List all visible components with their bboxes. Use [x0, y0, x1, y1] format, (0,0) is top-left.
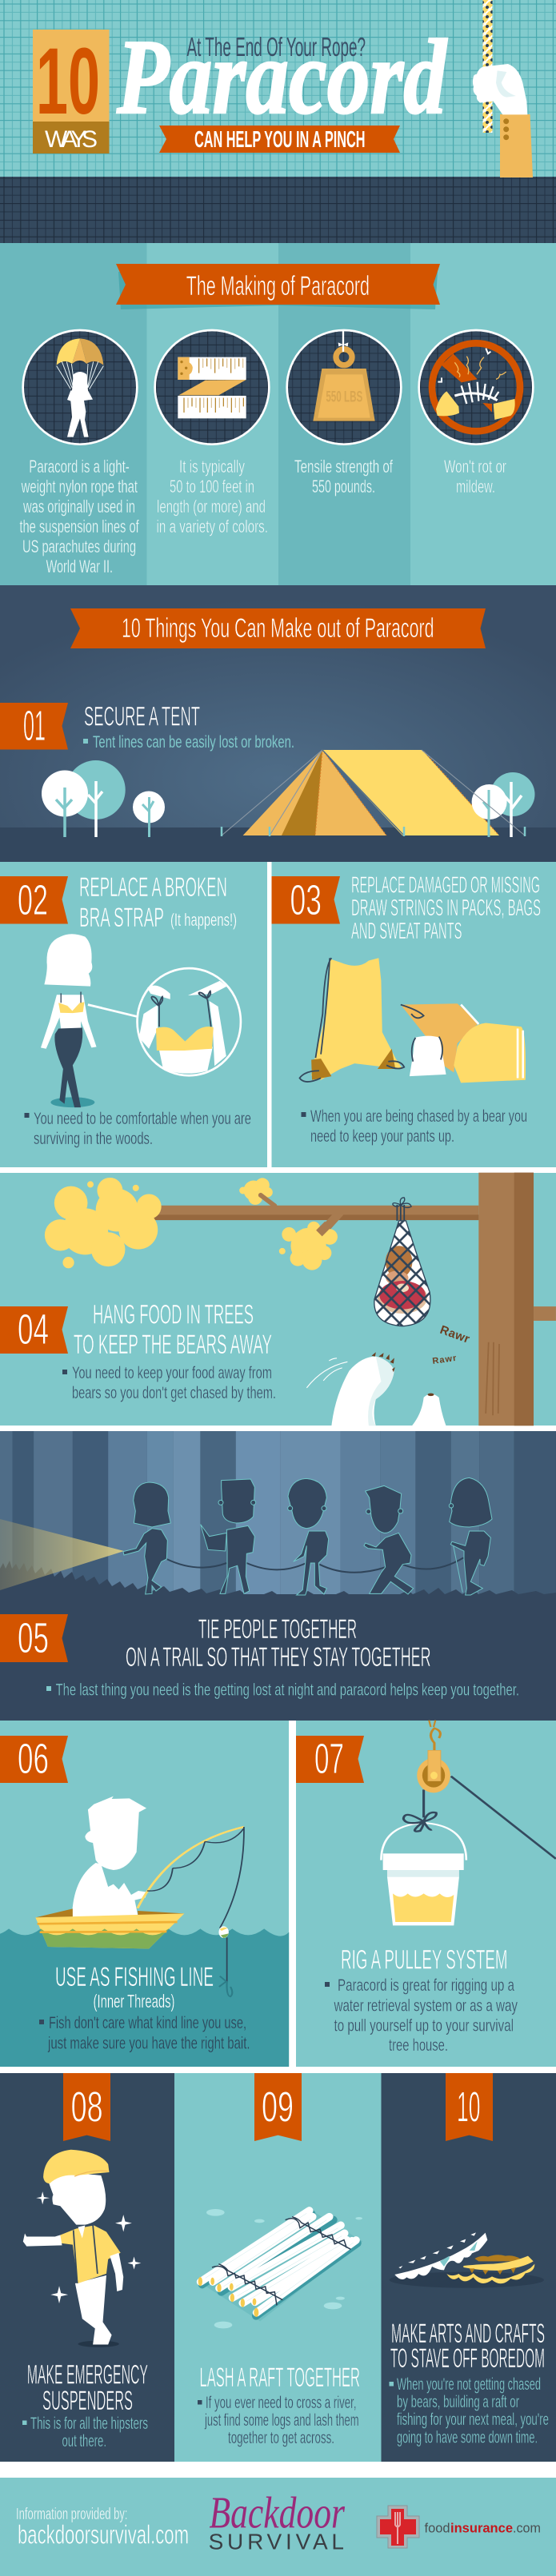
heading: tie people together	[126, 1614, 430, 1673]
text: paracord is great: tree house.	[389, 2036, 448, 2055]
text: chased by a bear	[301, 1107, 527, 1146]
text: information provided by: Information provided by:	[16, 2506, 128, 2523]
illustration: raft	[196, 2209, 362, 2328]
text block: paracord description	[19, 457, 139, 576]
heading: hang food: HANG FOOD IN TREES	[93, 1300, 254, 1330]
text block: paracord description: Paracord is a light-	[29, 457, 130, 477]
text block: won't rot: Won't rot or	[444, 457, 506, 477]
text: cross a river	[198, 2394, 358, 2447]
heading: emergency suspenders	[27, 2360, 148, 2416]
text: fish don't care: just make sure you have the right bait.	[47, 2035, 250, 2053]
illustration: tree, food and bear	[45, 1173, 556, 1426]
banner: 10 things	[70, 608, 486, 648]
panel: 03 draw strings	[272, 862, 556, 1167]
text block: length: It is typically	[179, 457, 245, 477]
text block: paracord description: was originally used in	[22, 496, 135, 516]
text block: length: length (or more) and	[157, 496, 266, 516]
illustration: fisherman in boat	[0, 1796, 289, 2067]
text block: paracord description: the suspension lines of	[19, 516, 139, 536]
panel: 09 raft	[174, 2073, 381, 2462]
ribbon: 10: 10	[457, 2084, 480, 2131]
ribbon: 06: 06	[18, 1735, 49, 1783]
text block: tensile strength: Tensile strength of	[294, 457, 394, 477]
text: fish don't care	[39, 2014, 250, 2053]
heading: use as fishing line	[55, 1962, 214, 2012]
text block: won't rot	[444, 457, 506, 496]
forest background	[0, 1431, 556, 1594]
heading: use as fishing line: USE AS FISHING LINE	[55, 1962, 214, 1992]
panel: 10 arts and crafts	[381, 2073, 556, 2462]
heading: tie people together: TIE PEOPLE TOGETHER	[198, 1614, 357, 1645]
text: keep food away: bears so you don't get chased by them.	[72, 1384, 276, 1402]
text block: length: 50 to 100 feet in	[170, 477, 254, 496]
footer	[0, 2478, 556, 2576]
illustration: hipster	[23, 2150, 141, 2347]
logo: backdoor survival: Backdoor	[210, 2488, 345, 2538]
text block: tensile strength	[294, 457, 394, 496]
text: cross a river: If you ever need to cross a river,	[206, 2394, 357, 2412]
ribbon: 09	[254, 2073, 302, 2141]
logo: food insurance: food	[424, 2520, 450, 2536]
logo: backdoor survival	[209, 2488, 345, 2554]
text: cross a river: just find some logs and lash them	[204, 2411, 358, 2430]
badge: 10 ways	[33, 29, 109, 154]
people silhouettes	[123, 1477, 492, 1595]
badge: 10 ways: 10	[36, 29, 100, 134]
ribbon: 05: 05	[18, 1614, 49, 1662]
logo: food insurance: insurance	[450, 2520, 513, 2536]
panel: 06 fishing line	[0, 1721, 289, 2067]
heading: replace damaged	[351, 873, 541, 944]
text: tent lines: Tent lines can be easily lost or broken.	[93, 733, 294, 752]
icon: hand holding rope	[473, 0, 533, 177]
rope between people	[166, 1557, 463, 1573]
heading: replace a broken bra strap: BRA STRAP	[79, 903, 164, 933]
icon: tape measure	[155, 330, 269, 445]
text: rawr	[432, 1323, 471, 1366]
text: keep food away: You need to keep your food away from	[72, 1364, 272, 1382]
illustration: woman and bra detail	[41, 934, 241, 1107]
text: paracord is great	[325, 1976, 518, 2055]
icon: weight 550 lbs: 550 LBS	[326, 389, 362, 405]
illustration: bags	[300, 958, 526, 1083]
illustration: tent	[243, 750, 499, 835]
text: fish don't care: Fish don't care what kind line you use,	[49, 2014, 246, 2032]
banner: the making of paracord	[116, 264, 440, 309]
banner: the making of paracord: The Making of Paracord	[186, 271, 370, 301]
text block: length: in a variety of colors.	[157, 516, 268, 536]
heading: arts and crafts	[390, 2319, 545, 2374]
text: comfortable: You need to be comfortable when you are	[34, 1110, 251, 1128]
title: Paracord: Paracord	[116, 18, 448, 136]
heading: replace a broken bra strap: (It happens!)	[170, 910, 237, 930]
header background	[0, 0, 556, 243]
heading: secure a tent: SECURE A TENT	[84, 702, 200, 732]
text: down time	[389, 2375, 549, 2446]
ribbon: 08	[63, 2073, 110, 2141]
heading: hang food	[74, 1300, 272, 1360]
text: comfortable: surviving in the woods.	[34, 1130, 153, 1148]
text: tent lines	[83, 733, 294, 752]
text block: paracord description: World War II.	[46, 556, 113, 576]
heading: replace a broken bra strap	[79, 872, 237, 933]
heading: use as fishing line: (Inner Threads)	[93, 1991, 174, 2012]
text block: won't rot: mildew.	[456, 477, 495, 496]
text: cross a river: together to get across.	[228, 2429, 334, 2447]
text: keep food away	[62, 1364, 276, 1402]
panel: the making of paracord	[0, 243, 556, 585]
ribbon: 02: 02	[18, 876, 48, 924]
illustration: pulley and bucket	[381, 1721, 556, 1925]
guy lines	[222, 750, 525, 836]
ribbon: 10	[446, 2073, 493, 2141]
ribbon: 04: 04	[18, 1306, 49, 1354]
panel: 02 bra strap	[0, 862, 272, 1167]
ribbon: 08: 08	[71, 2084, 103, 2131]
text block: paracord description: US parachutes during	[22, 536, 136, 556]
text: information provided by: backdoorsurvival.com	[18, 2520, 189, 2550]
text: comfortable	[24, 1110, 251, 1148]
heading: hang food: TO KEEP THE BEARS AWAY	[74, 1330, 272, 1360]
trees right	[472, 772, 534, 837]
icon: parachute	[23, 330, 137, 445]
panel: 07 pulley	[296, 1721, 556, 2067]
logo: backdoor survival: SURVIVAL	[209, 2530, 344, 2554]
text block: length	[157, 457, 268, 536]
text: information provided by	[16, 2506, 189, 2550]
text: hipsters: out there.	[62, 2432, 106, 2450]
icon: won't rot or mildew	[419, 330, 533, 445]
logo: food insurance	[377, 2506, 541, 2548]
ribbon: can help you in a pinch: CAN HELP YOU IN A PINCH	[194, 127, 365, 153]
icon: weight 550 lbs	[287, 330, 401, 445]
illustration: bracelets	[390, 2232, 544, 2288]
panel: 09 raft: LASH A RAFT TOGETHER	[200, 2363, 360, 2393]
heading: emergency suspenders: SUSPENDERS	[42, 2386, 133, 2416]
ribbon: can help you in a pinch	[159, 126, 400, 153]
text block: paracord description: weight nylon rope that	[21, 477, 138, 496]
ribbon: 03: 03	[290, 876, 322, 924]
panel: 08 suspenders: MAKE EMERGENCY	[27, 2360, 148, 2391]
heading: replace a broken bra strap: REPLACE A BROKEN	[79, 872, 227, 903]
panel: 01 secure a tent	[0, 585, 556, 862]
badge: 10 ways: WAYS	[45, 126, 98, 153]
ribbon: 01: 01	[23, 702, 46, 750]
trees left	[42, 760, 165, 837]
text: rawr: Rawr	[438, 1323, 471, 1346]
text: hipsters	[22, 2415, 148, 2450]
ribbon: 01	[0, 702, 68, 750]
subtitle: At The End Of Your Rope?	[187, 32, 366, 62]
text block: tensile strength: 550 pounds.	[312, 477, 375, 496]
text: chased by a bear: need to keep your pants up.	[310, 1127, 454, 1146]
ribbon: 09: 09	[262, 2084, 294, 2131]
flashlight beam	[0, 1519, 124, 1590]
panel: 08 suspenders	[0, 2073, 174, 2462]
text: rawr: Rawr	[432, 1354, 458, 1366]
panel: 04 hang food	[0, 1173, 556, 1426]
panel: 05 tie people together	[0, 1431, 556, 1721]
ground and grass	[0, 1561, 556, 1607]
ribbon: 07: 07	[314, 1735, 344, 1783]
text: hipsters: This is for all the hipsters	[30, 2415, 148, 2433]
logo: food insurance: .com	[513, 2520, 541, 2536]
